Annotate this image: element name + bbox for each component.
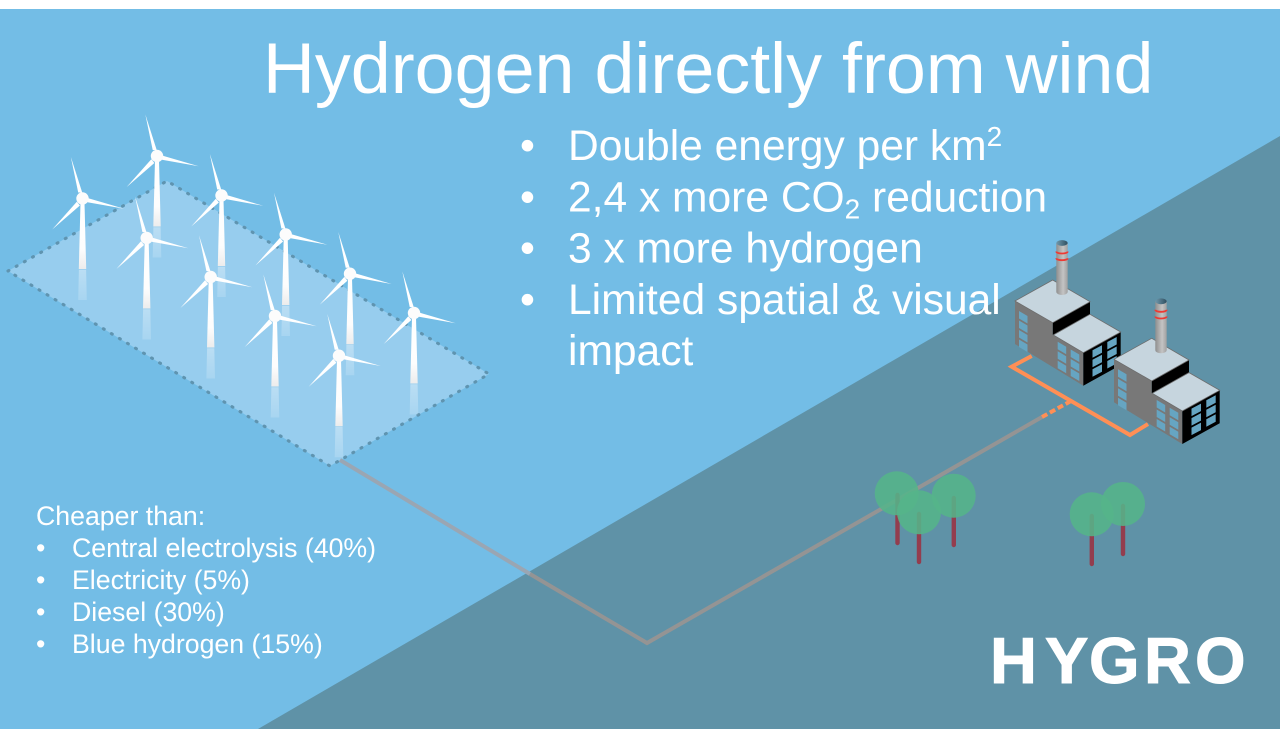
orange connection between factories bbox=[1012, 356, 1148, 435]
cost comparison list: Blue hydrogen (15%) bbox=[72, 629, 323, 659]
cost comparison list: Central electrolysis (40%) bbox=[72, 533, 376, 563]
benefits list: 2 bbox=[987, 121, 1002, 152]
trees bbox=[875, 471, 1145, 564]
benefits list: impact bbox=[568, 327, 693, 375]
cost comparison list: Diesel (30%) bbox=[72, 597, 225, 627]
cost comparison list: • bbox=[36, 597, 45, 627]
benefits list: Double energy per km bbox=[568, 122, 987, 170]
wind farm site area bbox=[8, 181, 489, 466]
offshore wind turbines bbox=[52, 114, 456, 457]
land area bbox=[258, 136, 1280, 729]
cost comparison list: Cheaper than: bbox=[36, 501, 205, 531]
benefits list: • bbox=[520, 224, 535, 272]
factories bbox=[1015, 240, 1220, 444]
cost comparison list bbox=[36, 501, 376, 659]
benefits list: 2 bbox=[845, 194, 860, 224]
cost comparison list: Electricity (5%) bbox=[72, 565, 250, 595]
benefits list bbox=[520, 121, 1047, 375]
benefits list: • bbox=[520, 174, 535, 222]
benefits list: reduction bbox=[860, 174, 1047, 222]
benefits list: Limited spatial & visual bbox=[568, 276, 1001, 324]
benefits list: • bbox=[520, 276, 535, 324]
title: Hydrogen directly from wind bbox=[263, 29, 1153, 109]
cable from wind farm to factories bbox=[340, 401, 1071, 643]
HYGRO logo: HYGRO bbox=[990, 624, 1246, 697]
benefits list: 3 x more hydrogen bbox=[568, 224, 923, 272]
cost comparison list: • bbox=[36, 629, 45, 659]
benefits list: 2,4 x more CO bbox=[568, 174, 845, 222]
cost comparison list: • bbox=[36, 565, 45, 595]
benefits list: • bbox=[520, 122, 535, 170]
cost comparison list: • bbox=[36, 533, 45, 563]
